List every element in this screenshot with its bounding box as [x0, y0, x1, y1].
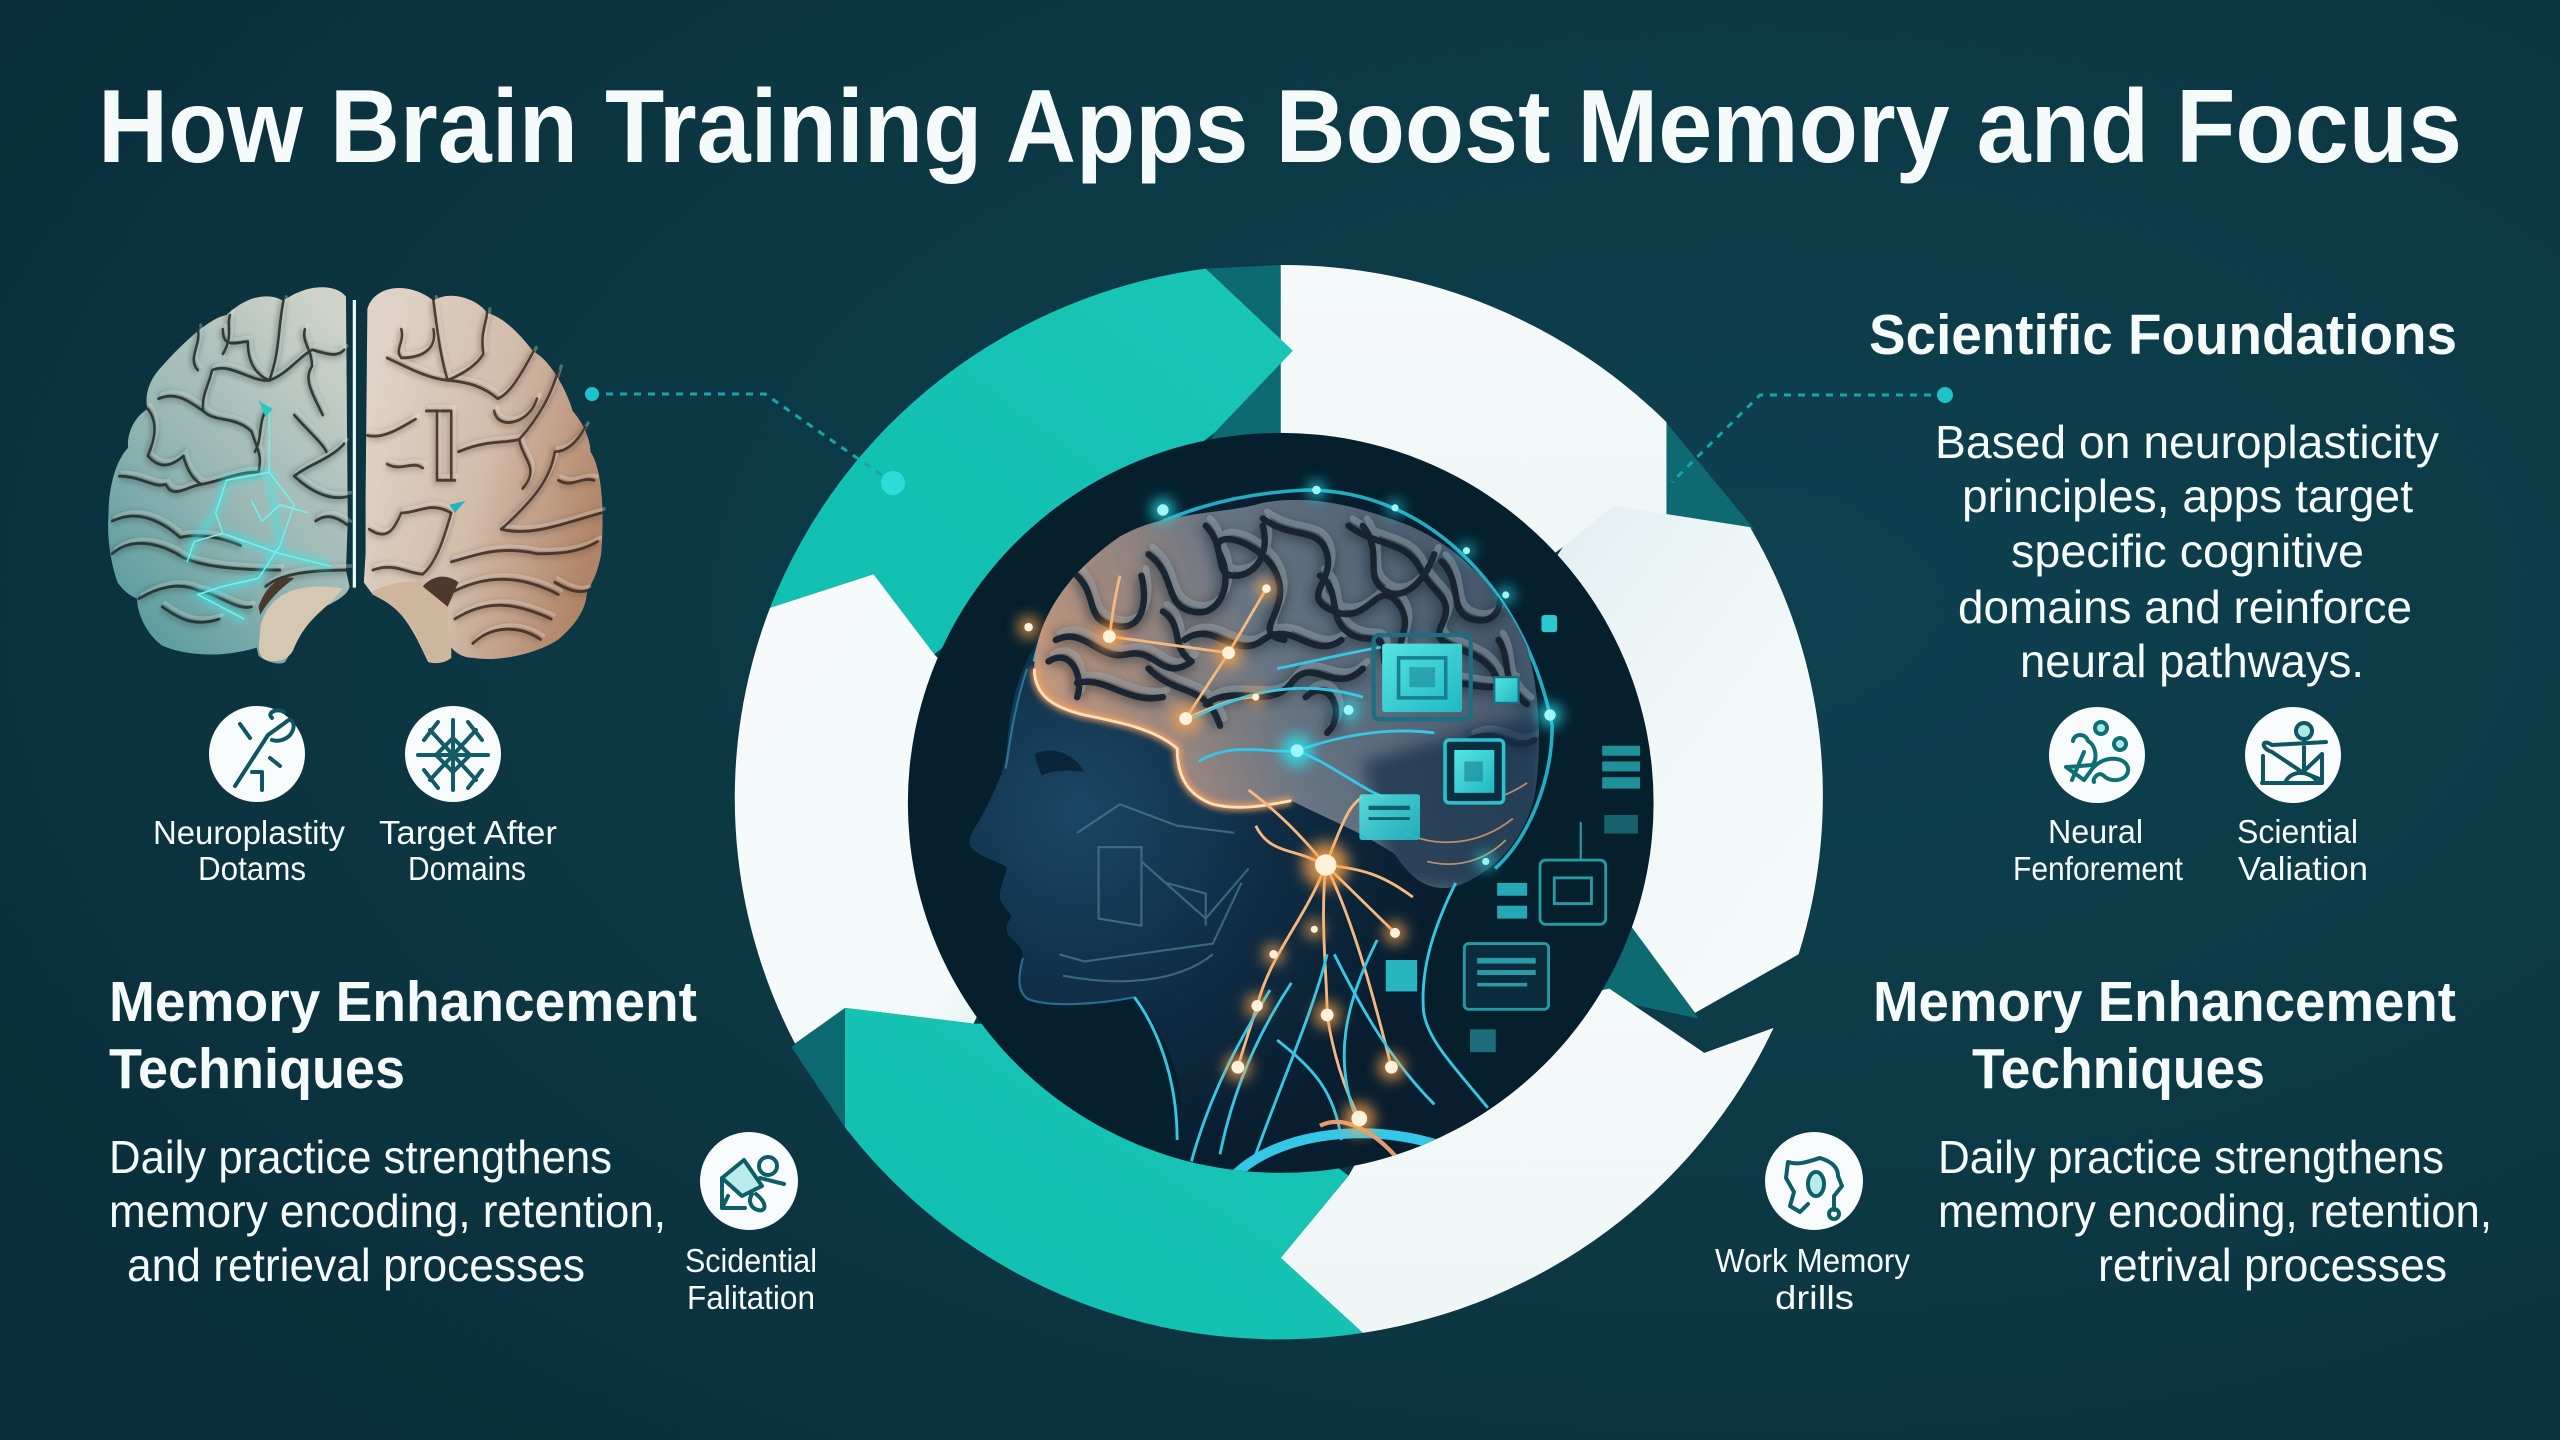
icon: Work Memory drills — [1765, 1132, 1863, 1230]
label: Neural Fenforement: Neural — [2048, 813, 2143, 850]
facial shading — [1034, 751, 1084, 776]
brain folds — [1049, 511, 1541, 897]
label: Neuroplastity Dotams: Dotams — [198, 850, 306, 887]
label: Neural Fenforement: Fenforement — [2013, 850, 2183, 887]
left hemisphere folds — [112, 301, 348, 622]
ring segment: white bottom-right arrow — [1281, 989, 1774, 1333]
right hemisphere folds — [367, 301, 601, 644]
icon: Neural Fenforement — [2049, 707, 2145, 803]
label: Target After Domains — [379, 814, 557, 887]
label: Work Memory drills: Work Memory — [1715, 1242, 1910, 1279]
label: Sciential Validation: Sciential — [2237, 813, 2358, 850]
label: Neural Fenforement — [2013, 813, 2183, 887]
head silhouette — [969, 508, 1488, 1172]
text block: Scientific Foundations description — [1935, 416, 2439, 687]
label: Sciential Validation — [2237, 813, 2368, 887]
label: Work Memory drills — [1715, 1242, 1910, 1316]
glowing cyan nodes — [1151, 481, 1561, 869]
text block: Scientific Foundations description: domains and reinforce — [1958, 581, 2412, 633]
label: Target After Domains: Target After — [379, 814, 557, 851]
label: Sciential Validation: Valiation — [2238, 850, 2368, 887]
text block: Scientific Foundations description: neural pathways. — [2020, 635, 2364, 687]
glowing orange nodes — [1018, 579, 1406, 1134]
text block: memory techniques right: memory encoding, retention, — [1938, 1185, 2492, 1237]
text block: Scientific Foundations description: specific cognitive — [2011, 525, 2364, 577]
head with glowing brain illustration — [969, 481, 1640, 1183]
section heading: Memory Enhancement Techniques left: Memory Enhancement — [109, 970, 697, 1034]
interface panels — [1359, 615, 1640, 1052]
ring segment: teal bottom-left arrow — [845, 1008, 1363, 1339]
text block: memory techniques left: memory encoding, retention, — [109, 1185, 666, 1237]
text block: Scientific Foundations description: principles, apps target — [1962, 470, 2413, 522]
icon: Scidential Falitation — [700, 1132, 798, 1230]
ring segment: teal top-left arrow — [770, 269, 1293, 654]
left brainstem — [259, 587, 342, 661]
right hemisphere — [364, 288, 604, 663]
cranium arc — [1034, 490, 1552, 869]
orange glowing brain edge — [1034, 669, 1291, 807]
left connector with dotted line — [585, 387, 905, 495]
left hemisphere — [108, 287, 351, 664]
right brainstem — [371, 582, 451, 663]
text block: memory techniques right — [1938, 1131, 2492, 1291]
brain divider line — [353, 300, 356, 588]
icon: Sciential Validation — [2245, 707, 2341, 803]
label: Target After Domains: Domains — [408, 850, 526, 887]
icon: Target After Domains — [405, 706, 501, 802]
ring segment: white right arrow — [1434, 506, 1823, 1013]
central ring diagram — [735, 265, 1823, 1339]
neural network lines — [1109, 576, 1413, 1119]
label: Neuroplastity Dotams: Neuroplastity — [153, 814, 345, 851]
brain mass — [1034, 500, 1539, 888]
section heading: Memory Enhancement Techniques left — [109, 970, 697, 1101]
label: Neuroplastity Dotams — [153, 814, 345, 887]
section heading: Memory Enhancement Techniques left: Techniques — [109, 1037, 405, 1101]
cyan neural lightning — [187, 401, 330, 619]
text block: memory techniques left: Daily practice strengthens — [109, 1131, 612, 1183]
icon: Neuroplastity Dotams — [209, 706, 305, 802]
text block: memory techniques left — [109, 1131, 666, 1291]
label: Work Memory drills: drills — [1775, 1279, 1854, 1316]
text block: memory techniques right: Daily practice strengthens — [1938, 1131, 2444, 1183]
inner dark circle — [908, 433, 1654, 1173]
section heading: Scientific Foundations: Scientific Foundations — [1869, 303, 2457, 367]
section heading: Memory Enhancement Techniques right — [1873, 970, 2456, 1101]
section heading: Memory Enhancement Techniques right: Memory Enhancement — [1873, 970, 2456, 1034]
label: Scidential Falitation — [685, 1242, 817, 1316]
ring segment: white left arrow — [735, 574, 1077, 1044]
section heading: Memory Enhancement Techniques right: Techniques — [1972, 1037, 2265, 1101]
anatomical brain illustration — [108, 287, 604, 664]
text block: memory techniques right: retrival processes — [2098, 1239, 2447, 1291]
right connector with dotted line — [1672, 387, 1953, 482]
ring accent: dark teal folds — [791, 265, 1754, 1133]
brain lower-right shading — [1363, 711, 1541, 897]
ring segment: white top-right — [1281, 265, 1666, 640]
label: Scidential Falitation: Scidential — [685, 1242, 817, 1279]
text block: Scientific Foundations description: Based on neuroplasticity — [1935, 416, 2439, 468]
face rim light — [1006, 669, 1134, 1004]
label: Scidential Falitation: Falitation — [687, 1279, 815, 1316]
title: How Brain Training Apps Boost Memory and Focus — [98, 69, 2462, 185]
text block: memory techniques left: and retrieval processes — [127, 1239, 585, 1291]
circuit lines on face — [1059, 804, 1249, 981]
